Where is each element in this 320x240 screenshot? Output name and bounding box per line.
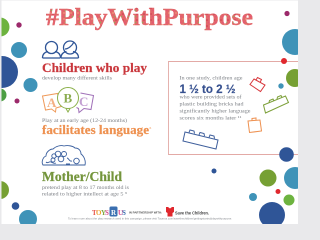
heading: facilitates language: facilitates language — [42, 123, 149, 137]
icon: ABC speech bubbles: A — [47, 95, 57, 110]
text: develop many different skills: develop many different skills — [42, 74, 112, 82]
text: study finding: plastic building bricks had — [180, 102, 244, 108]
icon: orange brick — [248, 118, 262, 132]
logo: Toys R Us: U — [118, 209, 123, 217]
icon: navy brick — [183, 130, 218, 149]
red dot — [281, 58, 287, 64]
text: study intro: In one study, children age — [180, 76, 243, 82]
heading: children who play: Children who play — [42, 61, 148, 75]
text: pretend play: pretend play at 8 to 17 months old is — [42, 185, 129, 191]
text: pretend play: related to higher intellect at age 5 ⁹ — [42, 192, 127, 198]
panel: study callout — [168, 58, 298, 162]
text: study finding: significantly higher language — [180, 108, 251, 114]
logo: Toys R Us: Y — [101, 209, 106, 217]
icon: figure — [166, 207, 174, 216]
navy dot on panel — [279, 147, 294, 162]
logo: Toys R Us: S — [105, 209, 109, 217]
icon: green brick — [264, 96, 288, 113]
icon: ABC speech bubbles — [42, 88, 94, 112]
icon: ABC speech bubbles: C — [79, 94, 88, 109]
text: in partnership with: IN PARTNERSHIP WITH: — [129, 210, 162, 214]
logo: Toys R Us: S — [122, 209, 126, 217]
icon: red brick — [250, 78, 265, 92]
logo text: Save the Children. — [175, 210, 209, 216]
logo: Save the Children — [166, 207, 209, 216]
title: #PlayWithPurpose — [46, 4, 253, 31]
icon: two children — [42, 41, 78, 58]
icon: brain with gears — [42, 146, 85, 165]
text: study finding: scores six months later ¹¹ — [180, 115, 242, 121]
footer text: To learn more about the play research used in this campaign, please visit Toysrus.com/savethechildren/gettingstarted/playwithpurpose. — [68, 216, 232, 220]
logo: Toys R Us: R — [111, 209, 117, 217]
logo: Toys R Us: O — [96, 209, 102, 217]
heading: mother/child: Mother/Child — [42, 169, 123, 184]
text: study finding: who were provided sets of — [180, 94, 242, 100]
icon: ABC speech bubbles: B — [64, 90, 72, 106]
logo: Toys R Us — [92, 206, 126, 217]
text: play at an early age: Play at an early age (12-24 months) — [42, 117, 127, 124]
logo: Toys R Us: T — [92, 209, 97, 217]
footnote mark: 6 — [150, 126, 152, 130]
stat: age range: 1 ½ to 2 ½ — [180, 84, 236, 96]
